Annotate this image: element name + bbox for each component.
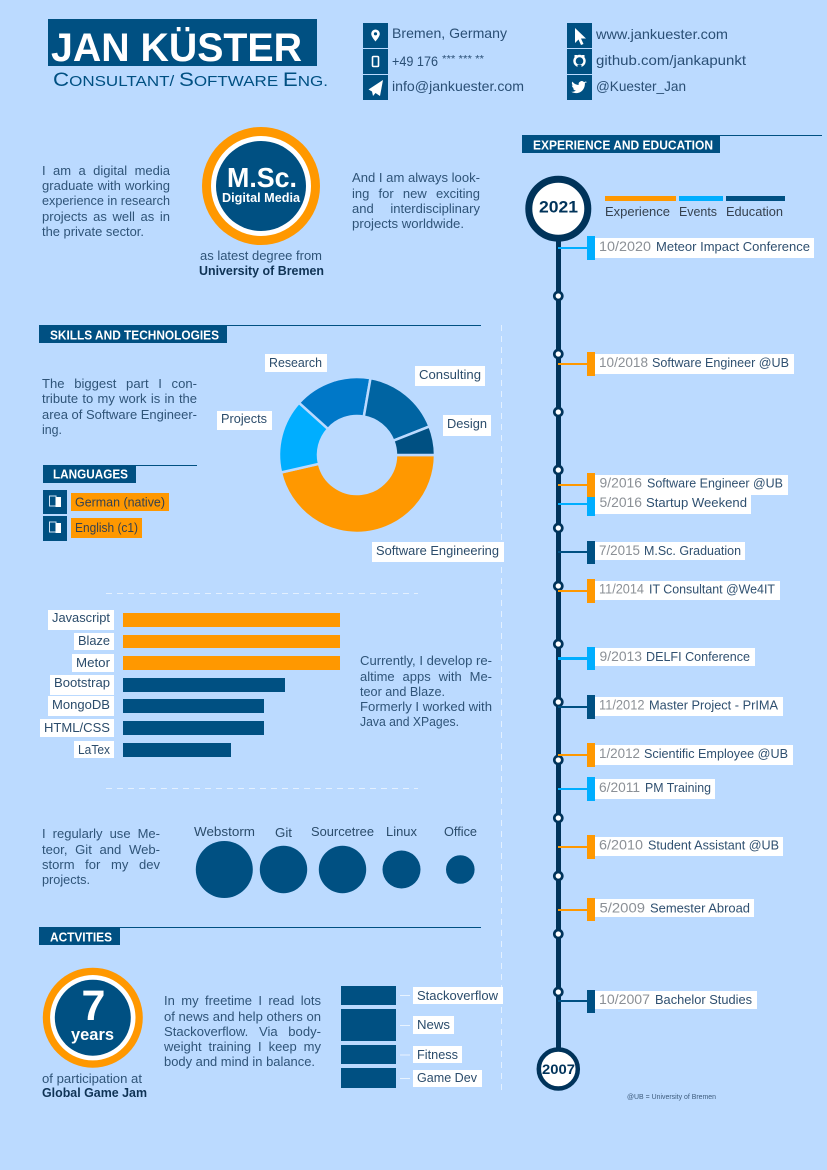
entry: Meteor Impact Conference [558,236,814,260]
badge: game jam years: 7 [82,982,105,1030]
text: freetime: body and mind in balance. [164,1054,315,1069]
bar: HTML/CSS: HTML/CSS [44,720,110,735]
activity: Game Dev: Game Dev [417,1070,477,1085]
entry: Scientific Employee: 1/2012 [599,746,640,761]
text: biggest part [42,376,197,437]
bubble: Git [260,825,307,893]
text: regularly use: teor, Git and Web- [42,842,160,857]
label: Design [443,415,491,436]
degree caption [199,248,324,278]
text: freetime: Stackoverflow. Via body- [164,1024,321,1039]
legend: experience [605,196,676,219]
language: German: German (native) [75,494,165,510]
bubble: Office [444,824,477,884]
bar: Metor [72,654,340,672]
timeline start: 2021 [529,179,588,238]
entry: Master Project: Master Project - PrIMA [649,698,778,712]
bubble: Linux: Linux [386,824,417,839]
bubble: Git: Git [275,825,292,840]
bar: LaTex: LaTex [78,742,110,757]
entry: PM Training [558,777,715,801]
text: regularly use: projects. [42,872,90,887]
entry: Meteor Impact Conference: Meteor Impact Conference [656,239,810,254]
text: biggest part: area of Software Engineer- [42,407,197,422]
contact details [363,23,746,100]
label: Design: Design [447,416,487,431]
language: English: English (c1) [75,520,138,535]
heading: languages [43,465,197,483]
language: English [43,516,142,541]
degree badge: Digital Media [222,191,301,205]
bar: Javascript: Javascript [52,610,110,625]
entry: Software Engineer 2016: Software Engineer @UB [647,476,783,490]
intro text right: ing for new exciting [352,186,480,201]
entry: Student Assistant [558,835,783,859]
degree badge [202,127,320,245]
heading: activities: ACTVITIES [50,930,112,944]
bubble: Webstorm [194,824,255,898]
timeline axis [554,235,562,1050]
entry: Scientific Employee: Scientific Employee @UB [644,746,788,761]
intro text left: I am a digital media [42,163,171,178]
entry: DELFI Conference: 9/2013 [600,649,642,664]
bubble: Sourcetree: Sourcetree [311,824,374,839]
entry: DELFI Conference: DELFI Conference [646,649,750,664]
entry: Software Engineer 2018: 10/2018 [599,355,648,370]
heading: activities [39,927,481,945]
contact: github: github.com/jankapunkt [596,52,746,68]
entry: Software Engineer 2018 [558,352,794,376]
entry: Semester Abroad [558,898,754,921]
entry: Scientific Employee [558,743,793,767]
heading: skills and technologies [39,325,481,343]
text: currently developing: Formerly I worked with [360,699,492,714]
text: currently developing: teor and Blaze. [360,684,445,699]
badge: game jam years: years [71,1026,114,1044]
contact: email: info@jankuester.com [392,78,524,94]
entry: IT Consultant: IT Consultant @We4IT [649,582,775,596]
legend: experience: Experience [605,204,670,219]
intro text left: the private sector. [42,224,144,239]
entry: Student Assistant: 6/2010 [599,838,643,852]
entry: Student Assistant: Student Assistant @UB [648,838,779,852]
entry: Startup Weekend: 5/2016 [600,495,642,510]
bar: HTML/CSS [40,719,264,737]
badge caption: of participation at [42,1071,142,1086]
entry: Bachelor Studies: Bachelor Studies [655,992,752,1007]
entry: M.Sc. Graduation: M.Sc. Graduation [644,543,741,558]
bar: Javascript [48,610,340,630]
panel: introduction [42,127,480,278]
activity: News: News [417,1017,450,1032]
text: biggest part: The biggest part I con- [42,376,197,391]
text: freetime: In my freetime I read lots [164,993,321,1008]
legend: education: Education [726,204,783,219]
job title: CONSULTANT/ SOFTWARE ENG. [53,70,328,91]
footnote: @UB = University of Bremen [627,1094,716,1101]
legend: events [679,196,723,219]
timeline end: 2007: 2007 [542,1061,575,1077]
entry: PM Training: PM Training [645,780,711,795]
bar: MongoDB [48,696,264,716]
entry: Software Engineer 2016 [558,473,788,497]
bar: Blaze: Blaze [78,633,110,648]
label: Software Engineering: Software Engineering [376,543,499,558]
activity: Stackoverflow: Stackoverflow [417,988,499,1003]
text: regularly use: storm for my dev [42,857,160,872]
badge: game jam years [43,968,143,1068]
bar: MongoDB: MongoDB [52,697,110,712]
bubble: Linux [382,824,420,888]
legend: events: Events [679,204,717,219]
chart: activities [341,986,503,1088]
donut chart: skills [279,377,435,533]
bubble: Webstorm: Webstorm [194,824,255,839]
heading: experience and education [522,135,822,153]
label: Research: Research [269,355,322,370]
text: freetime [163,993,321,1069]
contact: website [567,23,728,48]
contact: website: www.jankuester.com [595,26,728,42]
intro text left: projects as well as in [42,209,170,224]
activity: Game Dev [341,1068,482,1088]
bar chart: technologies [40,610,340,758]
timeline start: 2021: 2021 [539,198,578,216]
entry: Software Engineer 2016: 9/2016 [600,476,642,490]
text: currently developing: Java and XPages. [360,714,459,729]
text: regularly use: I regularly use Me- [42,826,160,841]
activity: Stackoverflow [341,986,503,1005]
legend [605,196,785,219]
text: freetime: of news and help others on [164,1009,321,1024]
label: Projects [217,411,272,430]
bubble: Office: Office [444,824,477,839]
entry: IT Consultant: 11/2014 [599,582,644,596]
contact: email [363,75,524,100]
entry: Master Project [558,695,783,719]
intro text right: and interdisciplinary [352,201,480,216]
degree badge: M.Sc. [227,162,297,193]
entry: Semester Abroad: 5/2009 [600,900,645,916]
entry: IT Consultant [558,579,780,603]
label: Consulting: Consulting [419,367,481,382]
contact: location: Bremen, Germany [392,25,507,41]
timeline end: 2007 [539,1050,578,1088]
intro text right [352,170,480,231]
entry: DELFI Conference [558,647,755,670]
contact: phone: +49 176 [392,53,438,69]
intro text left: graduate with working [42,178,170,193]
entry: Meteor Impact Conference: 10/2020 [599,239,651,254]
intro text right: And I am always look- [352,170,480,185]
text: freetime: weight training I keep my [163,1039,321,1054]
bar: Blaze [74,633,340,650]
contact: phone [363,49,484,74]
text: biggest part: ing. [42,422,62,437]
entry: Master Project: 11/2012 [599,698,644,712]
activity: Fitness: Fitness [417,1047,458,1062]
label: Projects: Projects [221,411,267,426]
header: name and title [48,19,328,91]
entry: Bachelor Studies [558,990,757,1013]
entry: Startup Weekend [558,495,751,516]
legend: education [726,196,785,219]
heading: languages: LANGUAGES [53,468,128,482]
name banner: JAN KÜSTER [51,25,302,70]
bubble chart: tools [194,824,477,898]
contact: phone: *** *** ** [442,54,484,65]
bubble: Sourcetree [311,824,374,893]
contact: location [363,23,507,48]
heading: skills and technologies: SKILLS AND TECHNOLOGIES [50,328,219,342]
badge caption [42,1071,147,1100]
heading: experience and education: EXPERIENCE AND EDUCATION [533,138,713,152]
contact: twitter [567,75,686,100]
donut labels [217,354,504,562]
text: biggest part: tribute to my work is in the [42,391,197,406]
language: German [43,490,169,514]
text: regularly use [42,826,160,887]
contact: twitter: @Kuester_Jan [596,78,686,94]
text: currently developing: Currently, I develop re- [360,653,492,668]
activity: Fitness [341,1045,462,1064]
activity: News [341,1009,454,1041]
entry: M.Sc. Graduation [558,541,745,564]
entry: Semester Abroad: Semester Abroad [650,900,750,916]
intro text left [42,163,171,239]
entry: Software Engineer 2018: Software Engineer @UB [652,355,789,370]
intro text right: projects worldwide. [352,216,464,231]
entry: M.Sc. Graduation: 7/2015 [599,543,640,558]
degree caption: University of Bremen [199,263,324,278]
bar: LaTex [74,741,231,758]
degree caption: as latest degree from [200,248,322,263]
contact: github [567,49,746,74]
intro text left: experience in research [42,193,170,208]
bar: Metor: Metor [76,655,111,670]
entry: Bachelor Studies: 10/2007 [599,992,650,1007]
entry: PM Training: 6/2011 [599,780,640,795]
entry: Startup Weekend: Startup Weekend [646,495,747,510]
timeline entries [558,236,814,1013]
text: currently developing [360,653,492,729]
text: currently developing: altime apps with Me- [360,669,492,684]
bar: Bootstrap: Bootstrap [54,675,110,690]
badge caption: Global Game Jam [42,1085,147,1100]
bar: Bootstrap [50,675,285,695]
label: Consulting [415,366,485,386]
